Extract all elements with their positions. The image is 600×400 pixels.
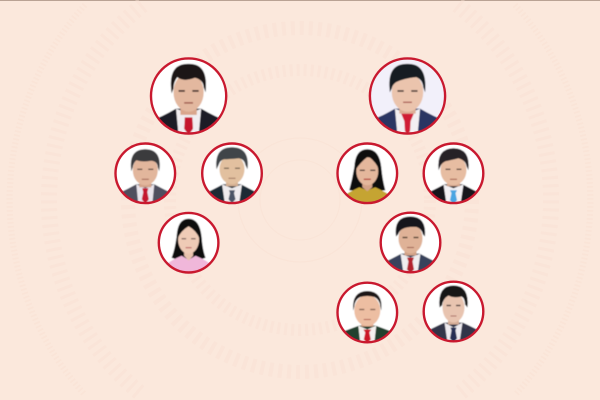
- portrait: top right leader: [369, 57, 446, 135]
- portrait: right row two, blue tie: [422, 142, 484, 204]
- portrait: right row two, woman in yellow: [336, 142, 398, 204]
- portrait: left row three, woman in pink: [158, 212, 220, 274]
- portrait: right bottom row, green jacket: [336, 282, 398, 344]
- portrait: left row two, first: [114, 142, 176, 204]
- top edge line: [0, 0, 600, 1]
- portrait: top left leader: [150, 57, 228, 135]
- portrait: left row two, second: [201, 142, 263, 204]
- portrait: right row three, centre: [380, 212, 442, 274]
- portrait: right bottom row, navy suit: [422, 280, 484, 342]
